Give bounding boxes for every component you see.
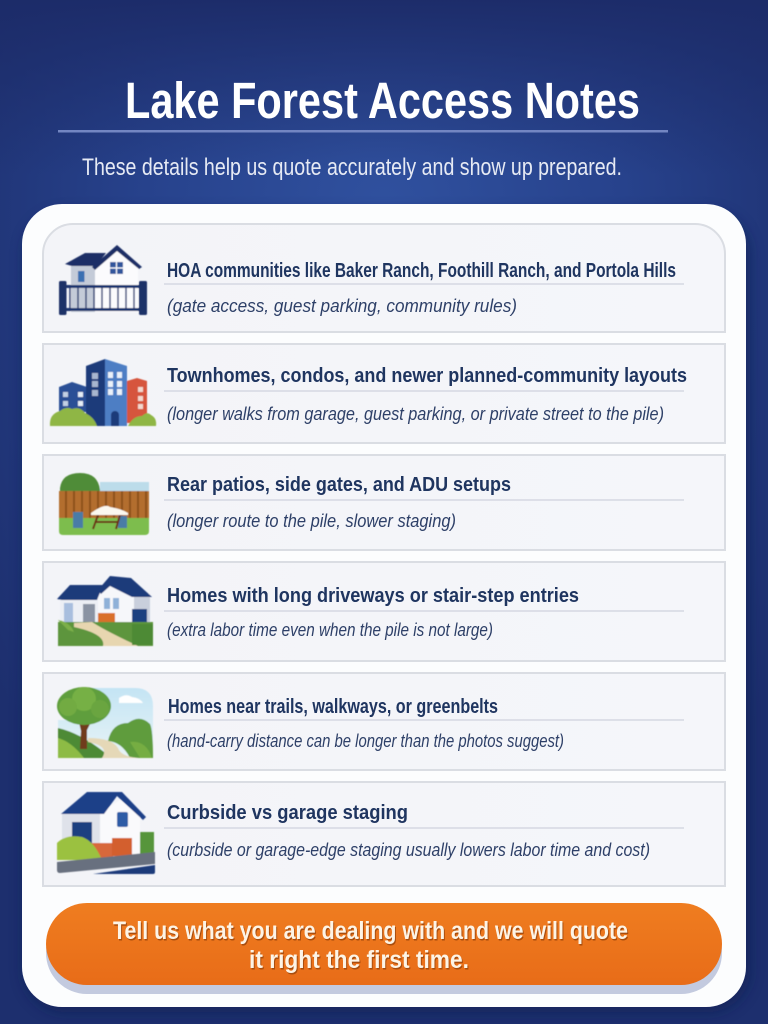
heading: Homes near trails, walkways, or greenbelts	[168, 696, 498, 718]
note: (hand-carry distance can be longer than the photos suggest)	[167, 731, 564, 751]
note: (longer route to the pile, slower staging)	[167, 511, 456, 531]
note: (curbside or garage-edge staging usually lowers labor time and cost)	[167, 840, 650, 860]
row: trails and greenbelts	[43, 673, 725, 770]
heading: Homes with long driveways or stair-step entries	[167, 585, 579, 607]
panel: access notes card	[22, 204, 746, 1007]
heading: Curbside vs garage staging	[167, 802, 408, 824]
row: curbside vs garage	[43, 782, 725, 886]
subtitle: These details help us quote accurately and show up prepared.	[82, 154, 622, 181]
button text	[113, 917, 629, 976]
button text: Tell us what you are dealing with and we will quote	[113, 917, 628, 945]
button text: Tell us what you are dealing with and we will quote	[114, 918, 629, 946]
heading: Rear patios, side gates, and ADU setups	[167, 474, 511, 496]
row: townhomes and condos	[43, 344, 725, 443]
button text: it right the first time.	[249, 946, 469, 974]
note: (extra labor time even when the pile is not large)	[167, 620, 493, 640]
note: (gate access, guest parking, community rules)	[167, 296, 517, 316]
button text: it right the first time.	[250, 948, 470, 976]
title: Lake Forest Access Notes	[125, 72, 640, 129]
icon: house with driveway	[57, 576, 153, 646]
note: (longer walks from garage, guest parking, or private street to the pile)	[167, 404, 664, 424]
row: long driveways	[43, 562, 725, 661]
icon: house at the curb	[57, 792, 155, 874]
icon: backyard patio	[59, 473, 149, 535]
row: HOA communities	[43, 224, 725, 332]
heading: Townhomes, condos, and newer planned-community layouts	[167, 365, 687, 387]
icon: apartment buildings	[50, 359, 156, 426]
row: rear patios	[43, 455, 725, 550]
call to action button	[46, 903, 722, 994]
icon: gated house	[59, 245, 147, 315]
icon: tree and trail	[57, 687, 153, 758]
